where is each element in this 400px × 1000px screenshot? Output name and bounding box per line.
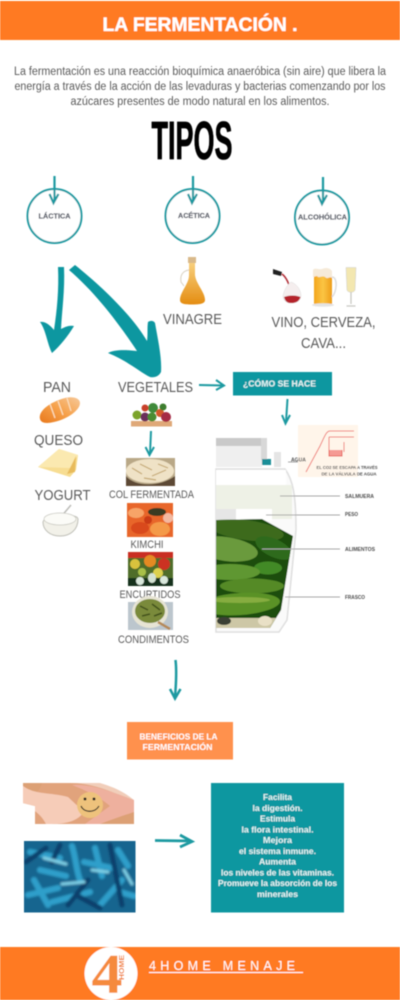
label: vino, cerveza, cava: VINO, CERVEZA,	[272, 314, 376, 331]
arrow: to vegetales	[69, 265, 161, 377]
photo: encurtidos	[128, 552, 173, 586]
label: queso: QUESO	[34, 432, 83, 449]
box: beneficios: BENEFICIOS DE LA	[140, 732, 218, 742]
box: beneficios	[127, 722, 233, 760]
jar labels: AGUA	[291, 458, 306, 464]
panel: benefit list: Estimula	[260, 814, 296, 824]
type circle: alcohólica: ALCOHÓLICA	[298, 212, 347, 222]
type circle: láctica: LÁCTICA	[38, 212, 70, 220]
panel: benefit list: Promueve la absorción de los	[218, 879, 338, 888]
wine pour	[273, 269, 301, 303]
jar body	[216, 469, 296, 632]
panel: benefit list: los niveles de las vitaminas.	[221, 868, 334, 877]
icon: bread	[40, 397, 80, 423]
beer mug	[312, 268, 336, 307]
pointer lines	[262, 462, 340, 597]
panel: benefit list: el sistema inmune.	[239, 847, 316, 856]
type circle: alcohólica	[295, 177, 349, 244]
champagne flute	[346, 268, 356, 306]
label: condimentos: CONDIMENTOS	[118, 634, 189, 646]
panel: benefit list: Facilita	[263, 793, 293, 802]
jar labels: DE LA VÁLVULA DE AGUA	[322, 472, 377, 476]
icon: cheese	[38, 449, 78, 477]
label: col fermentada: COL FERMENTADA	[109, 489, 195, 501]
panel: benefit list: minerales	[257, 890, 299, 899]
box: cómo se hace: ¿CÓMO SE HACE	[243, 378, 316, 388]
photo: col fermentada	[126, 458, 175, 486]
column: lácticos	[34, 379, 90, 536]
jar labels: FRASCO	[345, 595, 365, 601]
arrow: to col fermentada	[146, 431, 154, 455]
label: pan: PAN	[43, 379, 71, 396]
pickles	[215, 518, 294, 628]
arrow: to pan	[40, 267, 74, 353]
arrow: to jar	[282, 399, 290, 424]
panel: benefit list: Mejora	[263, 836, 293, 845]
drinks	[273, 268, 356, 307]
jar labels: SALMUERA	[345, 494, 374, 500]
photo: bacteria	[23, 840, 136, 914]
footer band	[0, 944, 400, 1000]
jar labels: PESO	[345, 512, 358, 518]
jar labels	[291, 458, 378, 601]
label: vino, cerveza, cava	[272, 314, 376, 352]
arrow: vegetales to cómo se hace	[199, 380, 224, 390]
brand name: 4HOME MENAJE	[149, 959, 295, 973]
icon: yogurt bowl	[43, 505, 78, 536]
photo: kimchi	[127, 503, 173, 537]
logo: 4home: HOME	[117, 955, 126, 980]
label: vinagre: VINAGRE	[163, 311, 222, 328]
type circle: láctica	[28, 176, 82, 243]
jar diagram	[215, 425, 378, 633]
intro paragraph	[14, 66, 387, 108]
icon: vegetables	[131, 403, 172, 426]
panel: benefit list: la flora intestinal.	[242, 825, 314, 834]
photo: belly with smile	[23, 783, 134, 824]
top banner	[0, 1, 400, 40]
box: cómo se hace	[233, 372, 332, 396]
arrow: to benefit list	[155, 835, 192, 847]
panel: benefit list: la digestión.	[252, 804, 302, 813]
arrow: to beneficios	[170, 660, 180, 698]
title: LA FERMENTACIÓN .	[102, 14, 298, 36]
jar labels: EL CO2 SE ESCAPA A TRAVÉS	[316, 465, 378, 470]
jar lid	[216, 438, 281, 467]
vinegar bottle	[180, 257, 205, 304]
logo: 4home	[84, 944, 138, 1000]
column: vegetales	[109, 379, 195, 646]
label: encurtidos: ENCURTIDOS	[120, 589, 180, 601]
valve inset	[298, 425, 358, 477]
panel: benefit list	[211, 783, 344, 912]
label: kimchi: KIMCHI	[130, 539, 164, 551]
photo: condimentos	[128, 596, 173, 630]
box: beneficios: FERMENTACIÓN	[142, 741, 212, 752]
type circle: acética: ACÉTICA	[178, 211, 210, 220]
label: vegetales: VEGETALES	[118, 379, 193, 396]
panel: benefit list: Aumenta	[259, 858, 297, 866]
text: TIPOS	[152, 111, 232, 171]
label: vino, cerveza, cava: CAVA...	[301, 335, 346, 352]
label: yogurt: YOGURT	[34, 487, 90, 504]
intro paragraph: azúcares presentes de modo natural en los alimentos.	[70, 96, 330, 108]
type circle: acética	[166, 176, 220, 243]
jar labels: ALIMENTOS	[345, 547, 376, 553]
